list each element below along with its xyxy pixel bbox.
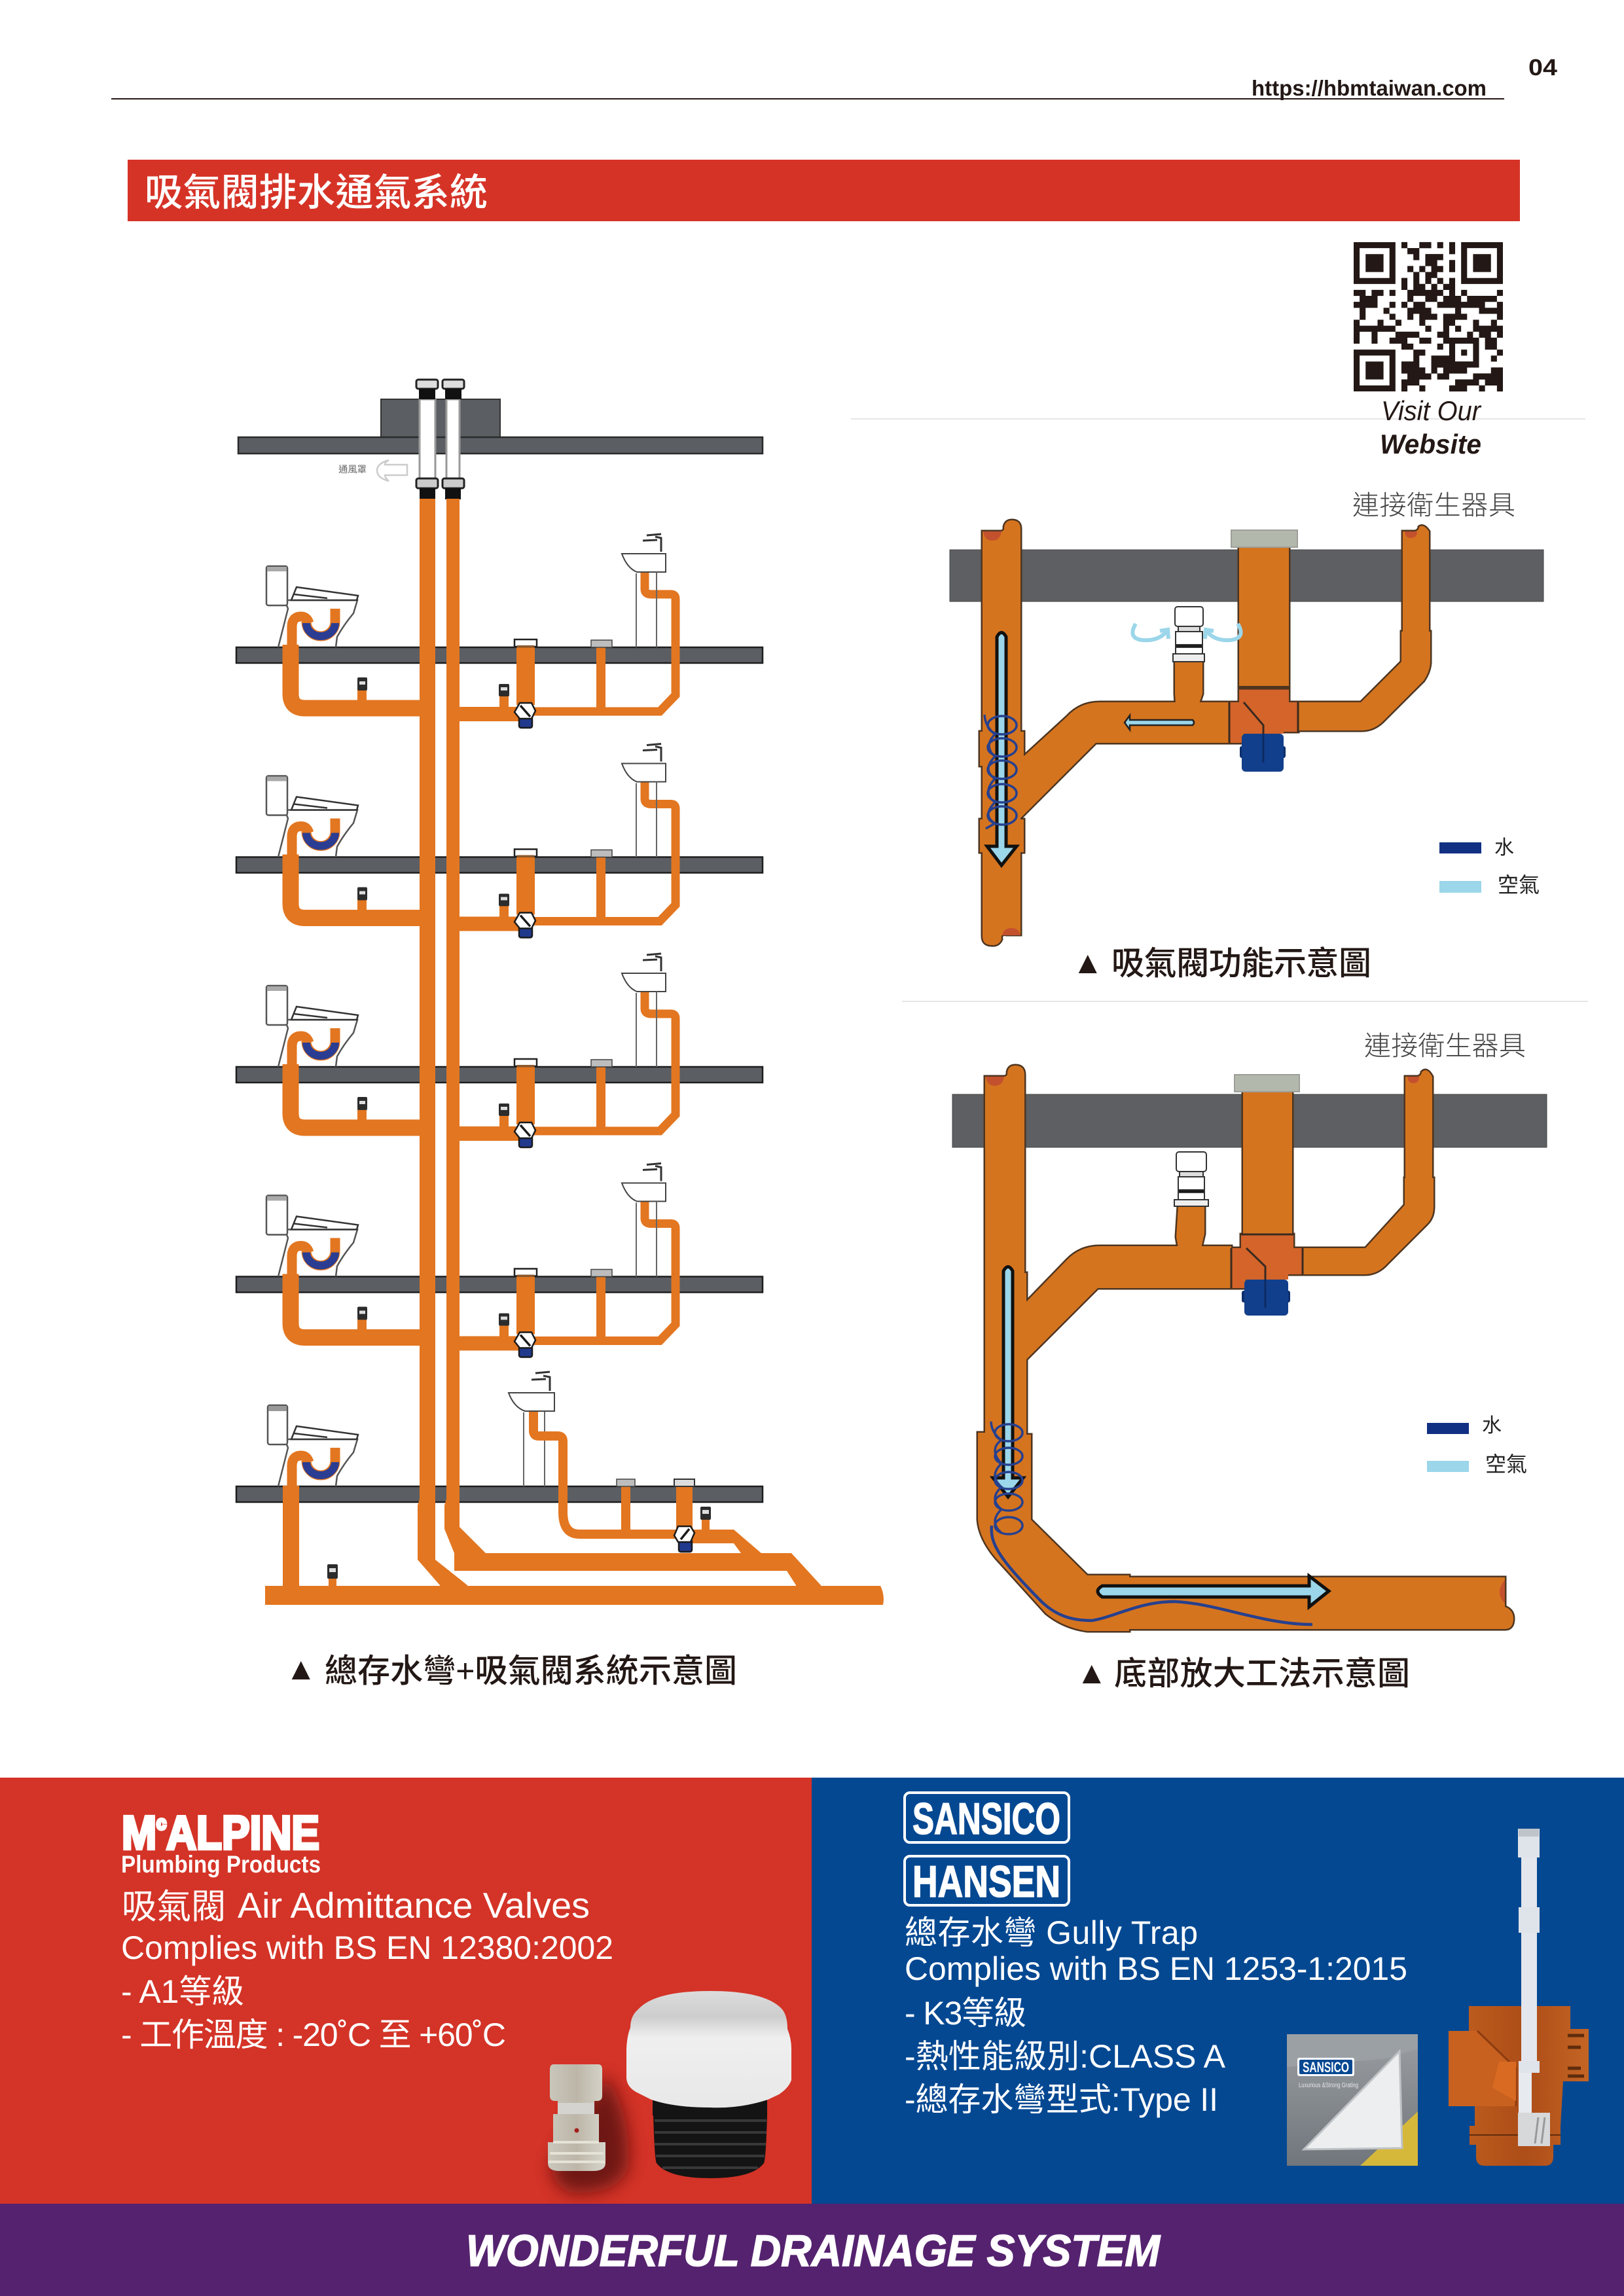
title bar <box>128 160 1520 221</box>
floor slab <box>952 1094 1547 1147</box>
right top caption: 吸氣閥功能示意圖 <box>1111 945 1371 982</box>
basin drain pipe <box>533 1412 677 1534</box>
product text: -總存水彎型式:Type II <box>905 2081 1218 2118</box>
legend: 空氣 <box>1485 1452 1527 1476</box>
product: large air valve <box>626 1991 791 2178</box>
product text: Complies with BS EN 12380:2002 <box>121 1929 613 1966</box>
logo: mcalpine <box>121 1807 321 1878</box>
water trap <box>1240 734 1286 772</box>
divider lines <box>851 418 1585 420</box>
legend: 空氣 <box>1498 873 1540 897</box>
grating catalogue: SANSICO <box>1303 2059 1349 2075</box>
main drain <box>265 1586 884 1605</box>
water spiral and flow <box>991 1422 1312 1624</box>
left system diagram <box>236 380 884 1605</box>
page number: 04 <box>1528 55 1558 81</box>
left caption: 總存水彎+吸氣閥系統示意圖 <box>325 1653 737 1689</box>
panel: mcalpine air admittance valves <box>0 1778 812 2204</box>
vertical air arrow <box>993 1267 1023 1497</box>
qr code <box>1354 242 1503 391</box>
small air flow arrow <box>1125 715 1194 730</box>
icon: basin <box>509 1372 554 1486</box>
product text: Complies with BS EN 1253-1:2015 <box>905 1950 1407 1987</box>
air swirl arrows <box>1132 624 1241 640</box>
right top caption: ▲ <box>1072 946 1104 980</box>
small valve shadow <box>552 2075 629 2193</box>
lower branch <box>693 1530 761 1553</box>
right bottom caption: ▲ <box>1076 1656 1108 1691</box>
tee fitting <box>1229 686 1298 762</box>
visit our website text <box>1380 395 1482 459</box>
heading: 吸氣閥排水通氣系統 <box>145 171 488 214</box>
floor outlet <box>1231 530 1297 547</box>
tee fitting <box>1231 1234 1303 1306</box>
product: gully trap <box>1449 1829 1589 2166</box>
toilet drop pipe <box>283 1486 299 1587</box>
product text: - A1等級 <box>121 1973 244 2010</box>
soil and vent stacks <box>265 499 884 1605</box>
right bottom diagram: enlarged base method <box>952 1031 1547 1631</box>
fixture label: 連接衛生器具 <box>1352 490 1515 520</box>
logo: mcalpine: Plumbing Products <box>121 1851 321 1878</box>
icon: vent cap <box>377 460 407 481</box>
legend <box>1427 1415 1527 1476</box>
floor drain <box>617 1479 635 1532</box>
vent pipes and caps <box>416 380 464 499</box>
pipes <box>980 520 1430 945</box>
legend <box>1439 837 1540 897</box>
product text: Air Admittance Valves <box>238 1885 590 1926</box>
grating catalogue <box>1287 2034 1418 2166</box>
product text: - 工作溫度 : -20˚C 至 +60˚C <box>121 2017 506 2053</box>
right top diagram: air admittance valve function <box>950 490 1543 945</box>
icon: air admittance valve <box>1174 1152 1208 1206</box>
product text <box>121 1885 613 2053</box>
floor 3 <box>236 954 763 1147</box>
product text: 總存水彎 Gully Trap <box>905 1914 1198 1951</box>
icon: small air valve <box>327 1564 338 1587</box>
right bottom caption: 底部放大工法示意圖 <box>1114 1655 1410 1692</box>
water trap <box>1242 1280 1290 1316</box>
visit our website text: Website <box>1380 429 1481 459</box>
left caption: ▲ <box>285 1652 317 1687</box>
icon: air admittance valve <box>1173 607 1204 662</box>
floor slab <box>950 550 1543 601</box>
floor 2 <box>236 744 763 937</box>
visit our website text: Visit Our <box>1381 395 1482 426</box>
trap riser <box>674 1479 695 1528</box>
product: small valve <box>548 2064 605 2171</box>
website url: https://hbmtaiwan.com <box>1252 76 1487 100</box>
horizontal air arrow <box>1098 1576 1329 1607</box>
end cut marks <box>986 1077 1505 1604</box>
footer slogan: WONDERFUL DRAINAGE SYSTEM <box>466 2226 1161 2276</box>
roof slab <box>238 399 763 454</box>
end cut marks <box>983 531 1417 935</box>
footer band <box>0 2204 1624 2296</box>
grating catalogue: Luxurious &Strong Grating <box>1299 2082 1358 2089</box>
vent cap label: 通風罩 <box>338 464 367 475</box>
logo: sansico: SANSICO <box>912 1794 1060 1844</box>
floor 1 <box>236 534 763 728</box>
icon: small air valve <box>700 1507 711 1530</box>
logo: mcalpine: ALPINE <box>166 1807 319 1859</box>
product text: -熱性能級別:CLASS A <box>905 2038 1226 2075</box>
logo: mcalpine: M <box>122 1807 161 1859</box>
icon: trap <box>674 1526 695 1552</box>
fixture label: 連接衛生器具 <box>1364 1031 1526 1061</box>
product text <box>905 1914 1407 2118</box>
logo: mcalpine: c <box>156 1812 166 1834</box>
water spiral <box>984 715 1017 829</box>
icon: toilet <box>268 1405 358 1494</box>
logo: hansen: HANSEN <box>912 1857 1060 1907</box>
panel: sansico hansen gully trap <box>812 1778 1624 2204</box>
floor outlet <box>1235 1075 1299 1092</box>
legend: 水 <box>1482 1415 1502 1437</box>
pipes <box>978 1066 1513 1631</box>
ground floor <box>236 1372 763 1587</box>
product text: - K3等級 <box>905 1995 1026 2032</box>
product text: 吸氣閥 <box>122 1888 226 1926</box>
legend: 水 <box>1494 837 1514 859</box>
floor 4 <box>236 1164 763 1357</box>
large air flow arrow <box>987 632 1017 865</box>
